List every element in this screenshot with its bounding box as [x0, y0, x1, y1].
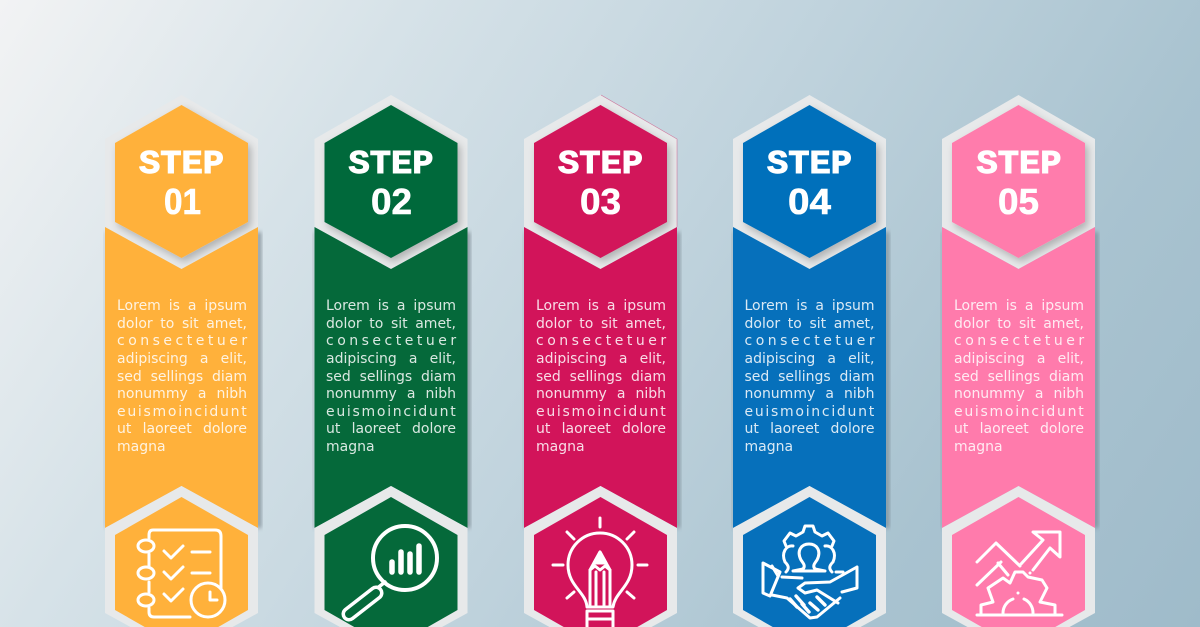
- text block: nonummy a nibh: [536, 386, 666, 402]
- text block: sed sellings diam: [954, 369, 1084, 385]
- top hexagon frame: [524, 95, 677, 269]
- text block: ut laoreet dolore: [954, 421, 1084, 437]
- text block: magna: [954, 439, 1003, 455]
- text block: [744, 298, 880, 463]
- text block: adipiscing a elit,: [954, 351, 1084, 367]
- icon: growth arrow and gear: [977, 532, 1062, 615]
- heading: STEP 02: 02: [371, 181, 412, 222]
- heading: STEP 05: [976, 146, 1062, 222]
- text block: Lorem is a ipsum: [744, 298, 874, 314]
- text block: consectetuer: [117, 333, 251, 349]
- icon: checklist with clock: [138, 530, 225, 617]
- bottom hexagon frame: [105, 486, 258, 627]
- panel body: [942, 227, 1095, 528]
- top hexagon: step 02: [324, 105, 458, 258]
- text block: ut laoreet dolore: [117, 421, 247, 437]
- top hexagon frame: [105, 95, 258, 269]
- heading: STEP 05: STEP: [976, 146, 1062, 183]
- text block: dolor to sit amet,: [326, 316, 456, 332]
- text block: euismoincidunt: [326, 404, 457, 420]
- text block: nonummy a nibh: [744, 386, 874, 402]
- text block: Lorem is a ipsum: [326, 298, 456, 314]
- text block: nonummy a nibh: [326, 386, 456, 402]
- text block: consectetuer: [954, 333, 1088, 349]
- heading: STEP 01: [139, 146, 224, 222]
- text block: nonummy a nibh: [954, 386, 1084, 402]
- text block: consectetuer: [536, 333, 670, 349]
- accent edge: [601, 95, 677, 227]
- top hexagon: step 04: [743, 105, 876, 258]
- panel: step 02: [313, 95, 470, 627]
- text block: euismoincidunt: [117, 404, 248, 420]
- text block: magna: [744, 439, 793, 455]
- heading: STEP 05: 05: [998, 181, 1039, 222]
- text block: sed sellings diam: [536, 369, 666, 385]
- text block: ut laoreet dolore: [744, 421, 874, 437]
- panel: step 03: [523, 95, 680, 627]
- text block: dolor to sit amet,: [954, 316, 1084, 332]
- panel: step 01: [104, 95, 261, 627]
- heading: STEP 02: [348, 146, 434, 222]
- text block: adipiscing a elit,: [536, 351, 666, 367]
- text block: [536, 298, 672, 463]
- top hexagon frame: [942, 95, 1095, 269]
- bottom hexagon: [534, 497, 667, 627]
- heading: STEP 01: 01: [164, 181, 201, 222]
- top hexagon: step 05: [952, 105, 1085, 258]
- text block: magna: [117, 439, 166, 455]
- text block: [326, 298, 462, 463]
- text block: magna: [326, 439, 375, 455]
- text block: Lorem is a ipsum: [954, 298, 1084, 314]
- text block: dolor to sit amet,: [117, 316, 247, 332]
- bottom hexagon: [952, 497, 1085, 627]
- bottom hexagon frame: [733, 486, 886, 627]
- text block: euismoincidunt: [744, 404, 876, 420]
- icon: light bulb with pencil: [553, 518, 647, 627]
- text block: ut laoreet dolore: [326, 421, 456, 437]
- text block: adipiscing a elit,: [326, 351, 456, 367]
- heading: STEP 03: 03: [580, 181, 621, 222]
- heading: STEP 04: STEP: [767, 146, 852, 183]
- heading: STEP 04: 04: [788, 181, 831, 222]
- text block: sed sellings diam: [744, 369, 874, 385]
- heading: STEP 04: [767, 146, 852, 222]
- text block: consectetuer: [744, 333, 878, 349]
- panel: step 05: [941, 95, 1098, 627]
- text block: [954, 298, 1090, 463]
- text block: dolor to sit amet,: [536, 316, 666, 332]
- panel body: [314, 227, 468, 528]
- top hexagon: step 03: [534, 105, 667, 258]
- text block: consectetuer: [326, 333, 460, 349]
- top hexagon frame: [733, 95, 886, 269]
- bottom hexagon: [115, 497, 248, 627]
- text block: Lorem is a ipsum: [536, 298, 666, 314]
- text block: Lorem is a ipsum: [117, 298, 247, 314]
- text block: euismoincidunt: [954, 404, 1085, 420]
- panel: step 04: [732, 95, 889, 627]
- heading: STEP 02: STEP: [348, 146, 434, 183]
- text block: adipiscing a elit,: [117, 351, 247, 367]
- text block: adipiscing a elit,: [744, 351, 874, 367]
- heading: STEP 03: STEP: [558, 146, 643, 183]
- text block: sed sellings diam: [326, 369, 456, 385]
- text block: [117, 298, 253, 463]
- text block: ut laoreet dolore: [536, 421, 666, 437]
- text block: dolor to sit amet,: [744, 316, 874, 332]
- bottom hexagon frame: [942, 486, 1095, 627]
- bottom hexagon frame: [524, 486, 677, 627]
- text block: magna: [536, 439, 585, 455]
- bottom hexagon: [324, 497, 458, 627]
- bottom hexagon frame: [314, 486, 468, 627]
- text block: nonummy a nibh: [117, 386, 247, 402]
- icon: team gear and handshake: [763, 526, 857, 618]
- panel body: [105, 227, 258, 528]
- panel body: [733, 227, 886, 528]
- heading: STEP 03: [558, 146, 643, 222]
- heading: STEP 01: STEP: [139, 146, 224, 183]
- icon: magnifier with bar chart: [349, 526, 437, 614]
- top hexagon: step 01: [115, 105, 248, 258]
- panel body: [524, 227, 677, 528]
- text block: sed sellings diam: [117, 369, 247, 385]
- text block: euismoincidunt: [536, 404, 667, 420]
- top hexagon frame: [314, 95, 468, 269]
- bottom hexagon: [743, 497, 876, 627]
